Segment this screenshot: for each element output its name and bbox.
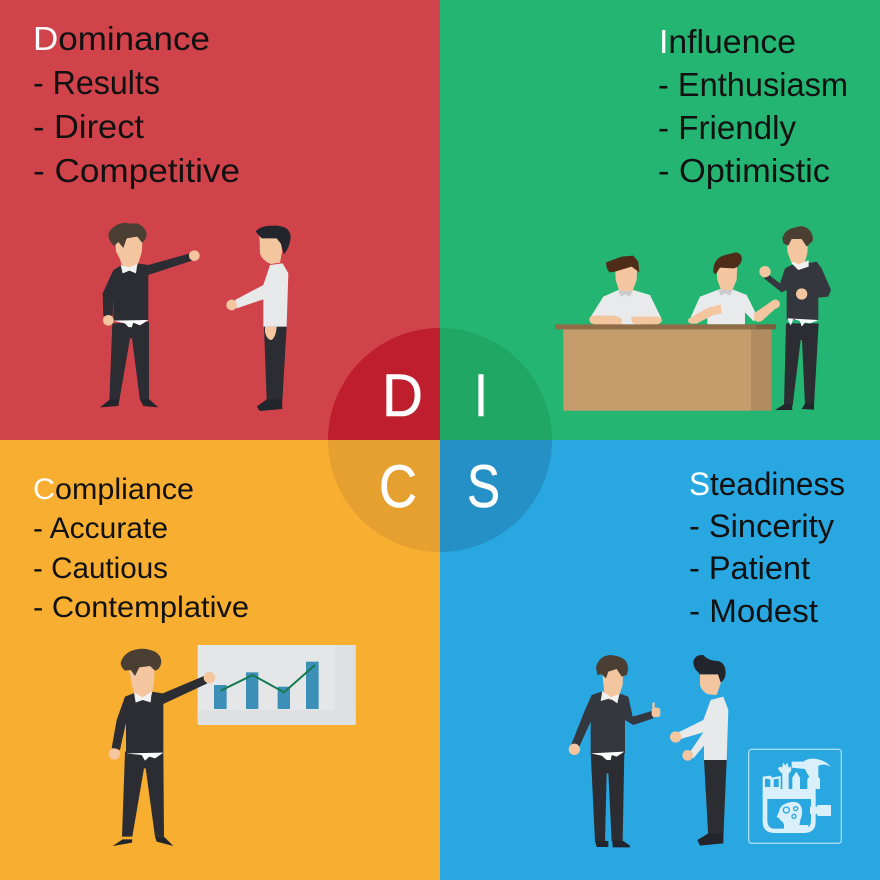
- text: influence list: [658, 23, 848, 189]
- desk: [555, 324, 776, 411]
- text: steadiness list: [689, 466, 845, 629]
- center DISC circle: [328, 328, 552, 552]
- figure: thumbs up person: [569, 655, 660, 847]
- illustration: influence meeting at desk: [555, 226, 831, 411]
- text: compliance list: Compliance: [33, 473, 194, 506]
- text: steadiness list: - Patient: [689, 550, 810, 586]
- center DISC circle: I: [474, 362, 488, 429]
- chart board: [198, 645, 356, 725]
- bar chart: [214, 662, 319, 709]
- center DISC circle: C: [379, 453, 417, 520]
- icon: toolbelt with head and gears: [749, 749, 841, 843]
- text: steadiness list: - Modest: [689, 593, 818, 629]
- illustration: compliance presenter with chart: [109, 645, 356, 846]
- panel: compliance: [0, 440, 440, 880]
- panel: steadiness: [440, 440, 880, 880]
- figure: standing colleague: [759, 226, 831, 410]
- center DISC circle: D: [382, 362, 423, 429]
- panel: influence: [440, 0, 880, 440]
- text: influence list: Influence: [659, 23, 796, 60]
- text: dominance list: Dominance: [33, 20, 210, 57]
- trend line: [221, 665, 315, 692]
- text: influence list: - Optimistic: [658, 152, 830, 189]
- text: dominance list: [33, 20, 240, 189]
- figure: listening person: [670, 655, 728, 846]
- text: steadiness list: Steadiness: [689, 466, 845, 502]
- figure: pointing manager: [100, 223, 200, 407]
- center DISC circle: S: [467, 453, 500, 520]
- figure: presenter: [109, 649, 215, 846]
- illustration: dominance figures: [100, 223, 291, 411]
- figure: seated person two: [688, 252, 780, 324]
- figure: seated person one: [589, 256, 662, 327]
- text: steadiness list: - Sincerity: [689, 508, 834, 544]
- text: influence list: - Enthusiasm: [658, 66, 848, 103]
- text: compliance list: - Contemplative: [33, 591, 249, 624]
- text: dominance list: - Competitive: [33, 152, 240, 189]
- text: compliance list: - Accurate: [33, 512, 168, 545]
- panel: dominance: [0, 0, 440, 440]
- figure: employee: [226, 226, 291, 411]
- illustration: steadiness figures and icon: [569, 655, 841, 847]
- text: influence list: - Friendly: [658, 109, 796, 146]
- text: dominance list: - Direct: [33, 108, 144, 145]
- text: compliance list: [33, 473, 249, 624]
- text: dominance list: - Results: [33, 64, 160, 101]
- text: compliance list: - Cautious: [33, 552, 168, 585]
